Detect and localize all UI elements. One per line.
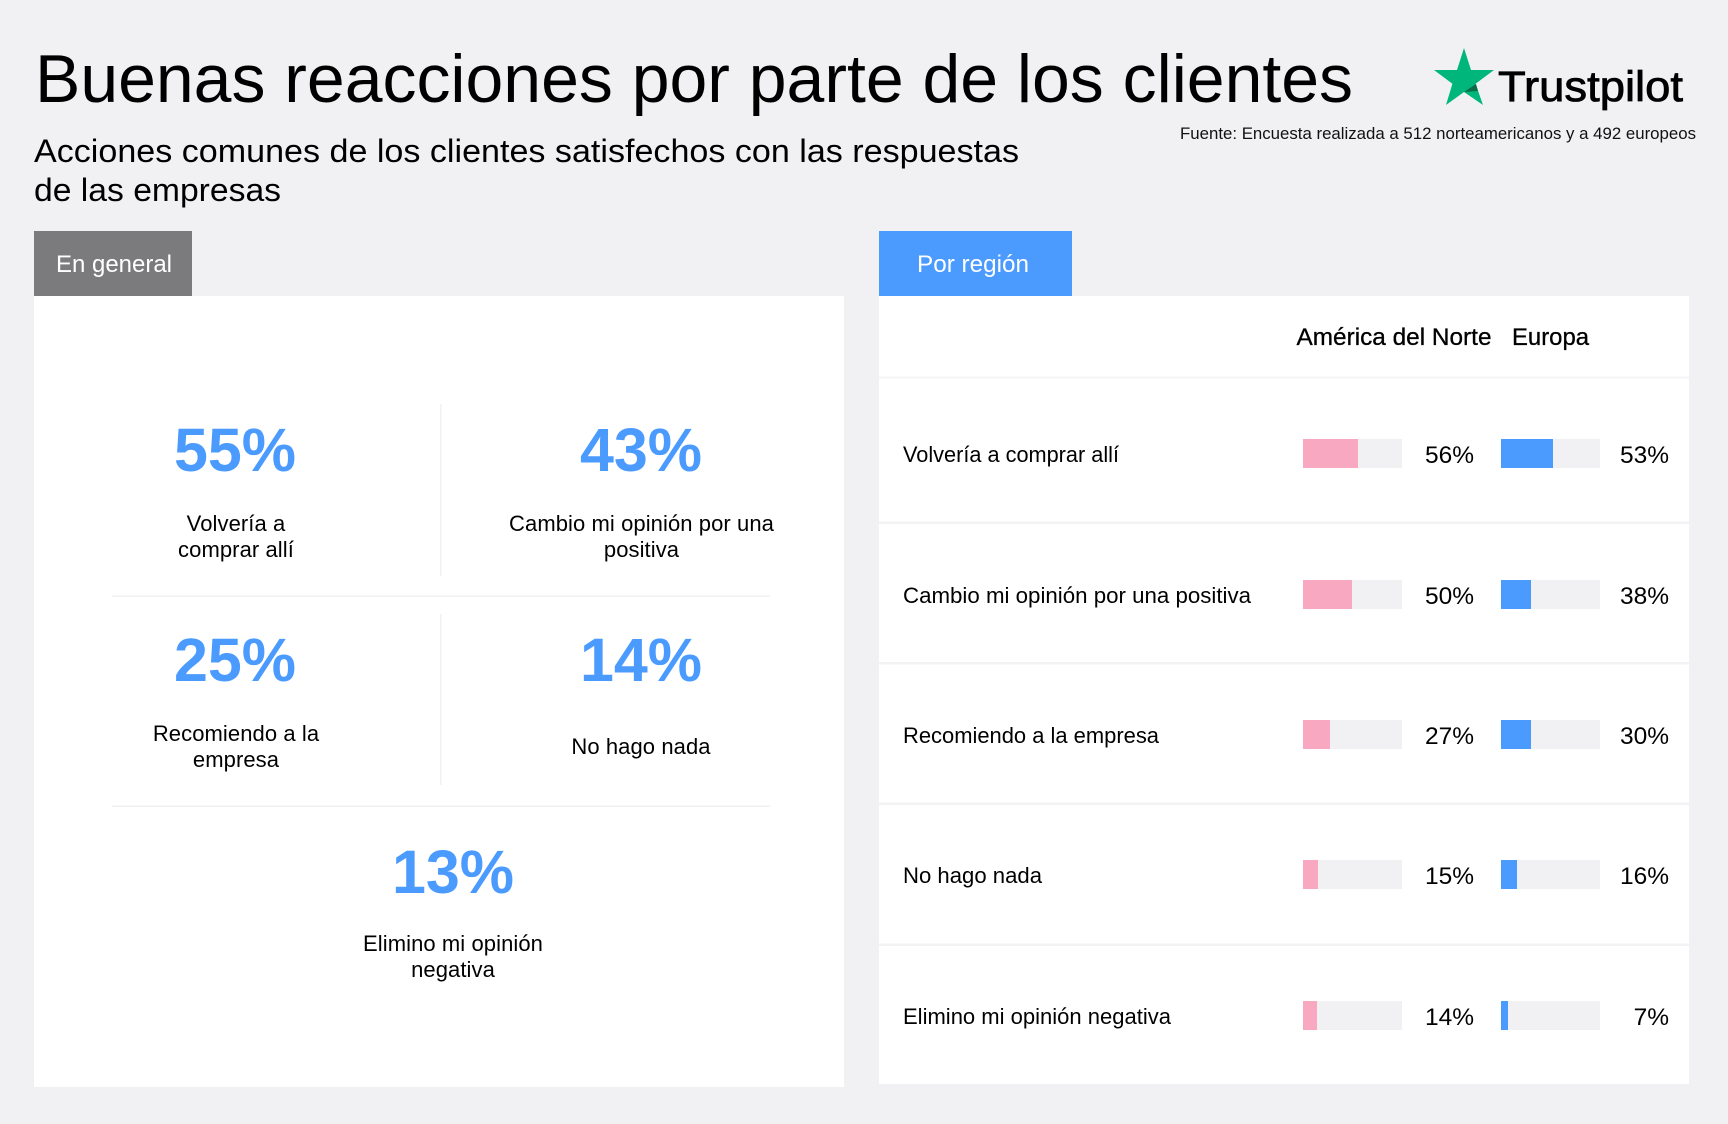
- row: Elimino mi opinión negativa: 7%: [1634, 1004, 1669, 1031]
- stat: 43%: 43%: [580, 416, 702, 484]
- row: Recomiendo a la empresa: Recomiendo a la empresa: [903, 723, 1160, 748]
- column headers: América del Norte: [1296, 324, 1492, 351]
- row: Recomiendo a la empresa: 30%: [1620, 723, 1669, 750]
- row: Recomiendo a la empresa: [903, 720, 1669, 750]
- tab: En general: En general: [56, 251, 172, 278]
- row: Cambio mi opinión por una positiva: [903, 580, 1669, 610]
- row: No hago nada: [903, 860, 1669, 890]
- stat: 55%: [174, 416, 296, 562]
- row: Cambio mi opinión por una positiva: Cambio mi opinión por una positiva: [903, 583, 1252, 608]
- row: Cambio mi opinión por una positiva: 50%: [1425, 583, 1474, 610]
- stat: 13%: 13%: [392, 838, 514, 906]
- tab: Por región: [879, 231, 1072, 297]
- row: Elimino mi opinión negativa: 14%: [1425, 1004, 1474, 1031]
- row: Volvería a comprar allí: Volvería a comprar allí: [903, 442, 1119, 467]
- stat: 14%: No hago nada: [571, 734, 711, 759]
- tab: En general: [34, 231, 192, 297]
- title: Buenas reacciones por parte de los clientes: [35, 41, 1353, 117]
- stat: 13%: [363, 838, 543, 982]
- column headers: [1296, 324, 1590, 351]
- stat: 43%: Cambio mi opinión por una: [509, 511, 775, 536]
- row: Volvería a comprar allí: 56%: [1425, 442, 1474, 469]
- row: No hago nada: No hago nada: [903, 863, 1043, 888]
- stat: 25%: Recomiendo a la: [153, 721, 320, 746]
- stat: 25%: empresa: [193, 747, 280, 772]
- source note: Fuente: Encuesta realizada a 512 norteamericanos y a 492 europeos: [1180, 125, 1696, 143]
- stat: 55%: 55%: [174, 416, 296, 484]
- subtitle: [34, 133, 1019, 208]
- panel: En general: [34, 296, 844, 1087]
- row: Volvería a comprar allí: [903, 439, 1669, 469]
- subtitle: Acciones comunes de los clientes satisfechos con las respuestas: [34, 133, 1019, 169]
- tab: Por región: Por región: [917, 251, 1029, 278]
- row: Elimino mi opinión negativa: [903, 1001, 1669, 1031]
- stat: 55%: Volvería a: [187, 511, 286, 536]
- stat: 14%: 14%: [580, 626, 702, 694]
- row: Recomiendo a la empresa: 27%: [1425, 723, 1474, 750]
- row: Elimino mi opinión negativa: Elimino mi opinión negativa: [903, 1004, 1172, 1029]
- stat: 43%: positiva: [604, 537, 680, 562]
- icon: star: [1434, 48, 1494, 105]
- stat: 25%: [153, 626, 320, 772]
- panel: Por región: [879, 296, 1689, 1084]
- stat: 55%: comprar allí: [178, 537, 294, 562]
- stat: 25%: 25%: [174, 626, 296, 694]
- row: No hago nada: 16%: [1620, 863, 1669, 890]
- stat: 43%: [509, 416, 775, 562]
- row: Volvería a comprar allí: 53%: [1620, 442, 1669, 469]
- row: No hago nada: 15%: [1425, 863, 1474, 890]
- icon: Trustpilot logo: [1434, 48, 1683, 111]
- column headers: Europa: [1512, 324, 1590, 351]
- icon: Trustpilot logo: Trustpilot: [1498, 63, 1683, 111]
- stat: 13%: Elimino mi opinión: [363, 931, 543, 956]
- subtitle: de las empresas: [34, 172, 281, 208]
- stat: 13%: negativa: [411, 957, 496, 982]
- stat: 14%: [571, 626, 711, 759]
- row: Cambio mi opinión por una positiva: 38%: [1620, 583, 1669, 610]
